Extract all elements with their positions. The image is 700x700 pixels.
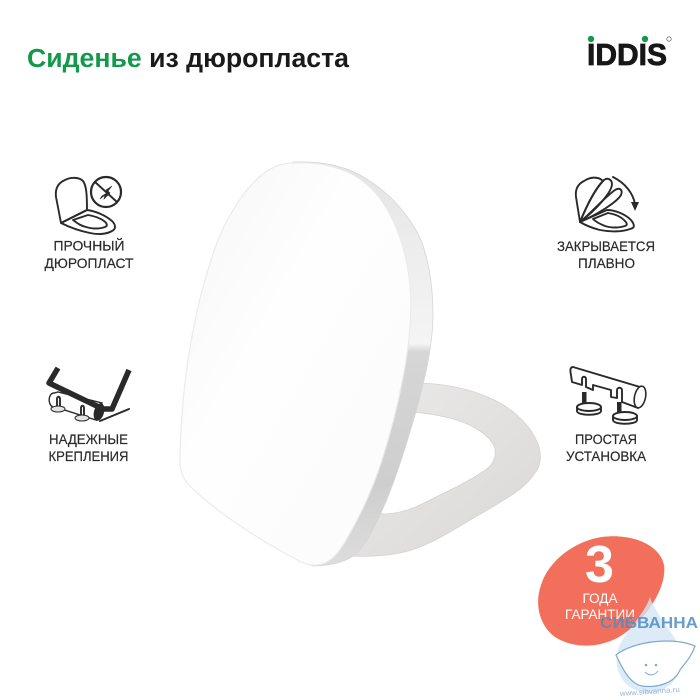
icon: soft close <box>576 177 639 231</box>
label: reliable fixings: НАДЕЖНЫЕ <box>49 431 128 447</box>
thin surface line <box>100 409 129 421</box>
website: www.sibvanna.ru <box>618 685 680 698</box>
lid rim <box>293 162 433 566</box>
right bracket <box>75 406 89 421</box>
seat outline <box>580 210 634 231</box>
watermark: Sibvanna <box>600 597 698 698</box>
label: soft close: ПЛАВНО <box>578 255 635 271</box>
thick lid frame <box>49 368 129 409</box>
label: durable duroplast <box>44 236 134 271</box>
seat ring <box>350 383 540 556</box>
label: durable duroplast: ДЮРОПЛАСТ <box>44 255 134 271</box>
crack symbol <box>91 177 121 207</box>
left screw <box>582 392 586 406</box>
water drop <box>617 597 682 693</box>
label: reliable fixings <box>48 431 128 464</box>
title: Сиденье из дюропласта <box>27 45 350 73</box>
right disc <box>613 412 637 424</box>
rotation arrow <box>613 177 639 211</box>
logo: iDDIS: IDDIS <box>587 37 667 72</box>
label: easy installation: УСТАНОВКА <box>566 448 647 464</box>
icon: reliable fixings <box>49 368 129 422</box>
badge: 3 year warranty <box>538 536 664 646</box>
brand name: СИБВАННА <box>600 615 698 632</box>
label: easy installation: ПРОСТАЯ <box>575 431 637 447</box>
left disc <box>577 403 601 415</box>
right screw <box>617 402 622 416</box>
badge: 3 year warranty: ГОДА <box>583 591 617 606</box>
rod end cap <box>632 385 648 409</box>
hinge rod <box>49 392 102 420</box>
icon: easy installation <box>570 367 648 424</box>
lid front <box>180 163 411 565</box>
label: soft close <box>557 238 655 271</box>
label: reliable fixings: КРЕПЛЕНИЯ <box>48 448 128 464</box>
label: easy installation <box>566 431 647 464</box>
lid outline <box>56 178 87 223</box>
icon: durable duroplast <box>56 177 121 234</box>
seat outline <box>61 210 115 234</box>
label: durable duroplast: ПРОЧНЫЙ <box>54 236 124 254</box>
bath face <box>616 641 695 686</box>
badge: 3 year warranty: ГАРАНТИИ <box>565 607 635 622</box>
left bracket <box>51 397 65 412</box>
product image: toilet seat <box>180 162 540 566</box>
closing lid petals <box>576 178 603 222</box>
label: soft close: ЗАКРЫВАЕТСЯ <box>557 238 655 254</box>
hinge end cap <box>92 402 106 422</box>
rod with notches <box>570 367 640 408</box>
badge: 3 year warranty: 3 <box>585 536 614 594</box>
